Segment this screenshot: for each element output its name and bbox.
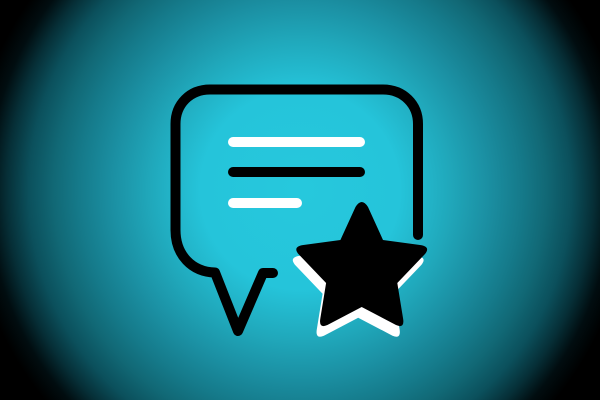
text line: top white <box>228 137 365 147</box>
text line: bottom white <box>228 198 302 208</box>
star: black <box>296 202 427 326</box>
speech bubble outline <box>176 90 418 331</box>
star shadow: white <box>293 213 424 337</box>
text line: middle black <box>228 167 365 177</box>
